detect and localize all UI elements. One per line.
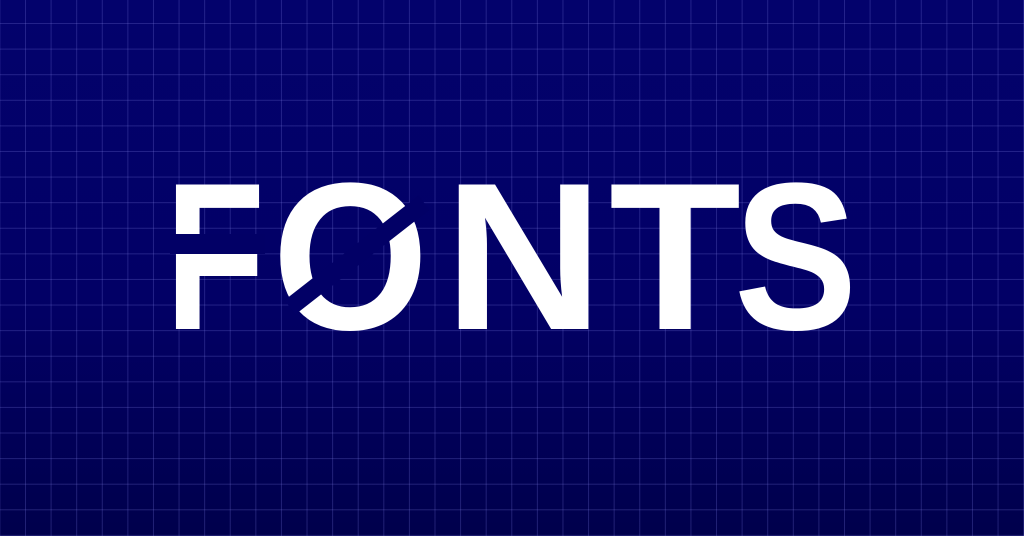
letter F: F <box>165 139 265 374</box>
stencil cuts <box>170 202 424 312</box>
letter N: N <box>444 139 603 374</box>
letter O: O <box>272 139 429 374</box>
letter S: S <box>734 139 857 374</box>
letter T: T <box>609 139 741 374</box>
